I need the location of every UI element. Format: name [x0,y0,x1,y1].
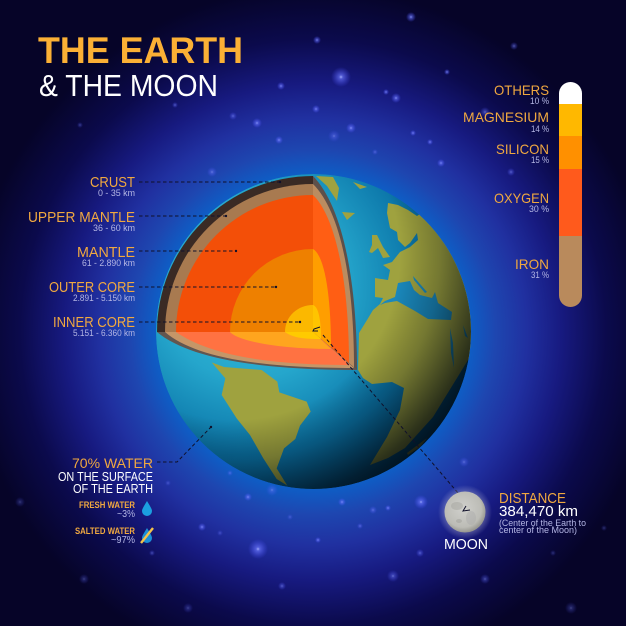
leader end dots [210,181,301,428]
water callout: FRESH WATER [79,500,135,510]
label: iron: 31 % [531,270,549,281]
label: magnesium: MAGNESIUM [463,109,549,125]
water callout: OF THE EARTH [73,482,153,496]
label: silicon: SILICON [496,141,549,157]
distance text: DISTANCE [499,491,566,507]
water callout: ~3% [117,509,135,520]
label: others: 10 % [530,96,549,107]
British Isles [369,235,390,258]
label: mantle: 61 - 2.890 km [82,258,135,269]
inland seas [380,276,468,368]
label: silicon [496,141,549,166]
label: crust: CRUST [90,175,135,191]
label: others [494,82,549,107]
label: outer core: 2.891 - 5.150 km [73,293,135,304]
label: upper mantle: 36 - 60 km [93,223,135,234]
title [38,30,243,103]
bottom face [157,332,357,370]
title: THE EARTH [38,30,243,71]
label: oxygen: 30 % [529,204,550,215]
label: inner core: 5.151 - 6.360 km [73,328,135,339]
water callout [58,455,153,546]
label: upper mantle [28,210,135,234]
layer labels [28,175,135,339]
title: & THE MOON [39,68,218,103]
Greenland, Iceland, Svalbard [316,176,339,201]
label: magnesium [463,109,549,135]
leader lines [139,182,470,507]
left face [157,176,313,332]
label: crust: 0 - 35 km [98,188,135,199]
label: upper mantle: UPPER MANTLE [28,210,135,226]
label: others: OTHERS [494,82,549,98]
icon: salted water drop [141,528,153,543]
composition labels [463,82,550,281]
moon label: MOON [444,537,488,553]
composition bar [559,82,582,307]
icon: fresh water drop [142,501,152,516]
label: mantle [77,245,135,269]
label: magnesium: 14 % [531,124,549,135]
label: outer core: OUTER CORE [49,280,135,296]
water callout: 70% WATER [72,455,153,471]
earth globe [156,174,471,489]
label: inner core [53,315,135,339]
distance text: center of the Moon) [499,525,577,536]
label: iron: IRON [515,256,549,272]
distance text [499,491,586,536]
Madagascar [407,438,427,455]
South America [212,362,311,486]
continents [212,176,471,486]
label: crust [90,175,135,199]
label: inner core: INNER CORE [53,315,135,331]
label: silicon: 15 % [531,155,549,166]
center marker [313,327,320,331]
label: oxygen: OXYGEN [494,190,549,206]
label: iron [515,256,549,281]
distance text: 384,470 km [499,504,578,520]
water callout: ON THE SURFACE [58,470,153,484]
water callout: ~97% [111,535,135,546]
distance text: (Center of the Earth to [499,518,586,529]
label: mantle: MANTLE [77,245,135,261]
right face [313,176,357,370]
water callout: SALTED WATER [75,526,135,536]
globe shading [183,199,471,489]
earth cutaway: interior layers [157,176,357,370]
moon [438,485,492,539]
Eurasia and Africa [358,203,471,465]
label: oxygen [494,190,550,215]
label: outer core [49,280,135,304]
